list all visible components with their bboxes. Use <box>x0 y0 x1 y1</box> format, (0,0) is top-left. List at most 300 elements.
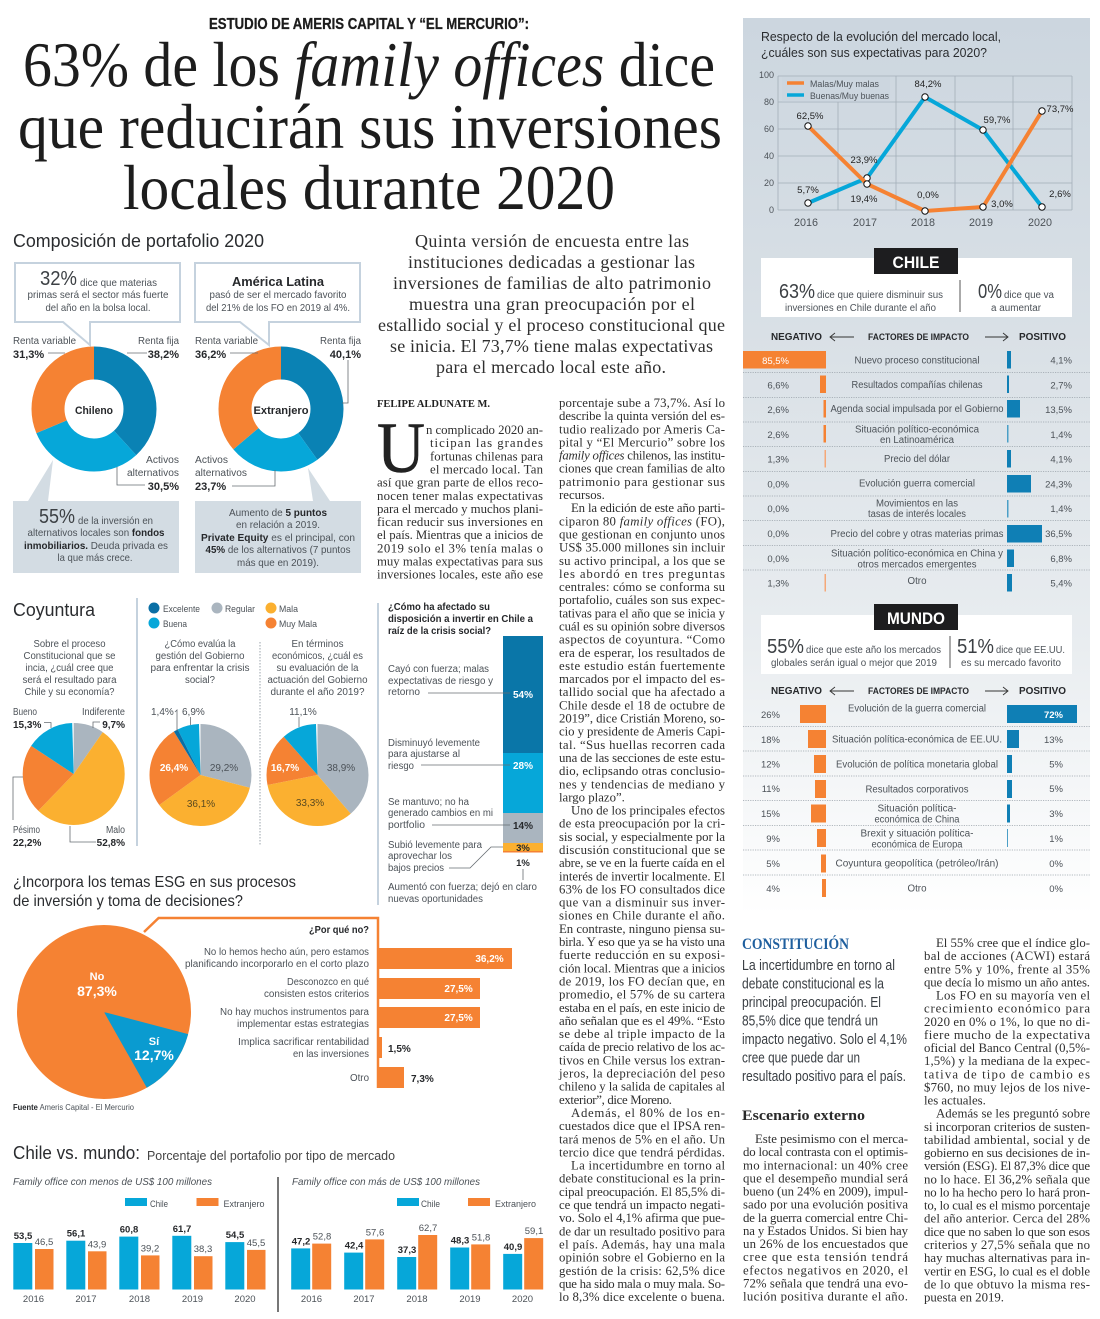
question 2: gestión del Gobierno <box>156 651 245 662</box>
sidebar text: principal preocupación. El <box>742 994 881 1011</box>
article column 2: nes y tendencias de mediano y <box>559 777 726 791</box>
title: locales durante 2020 <box>123 153 615 223</box>
stack labels: Subió levemente para <box>388 840 482 851</box>
chart: menos de 100 millones <box>13 1177 266 1305</box>
article column 3: bueno (un 24% en 2009), impul- <box>743 1184 908 1198</box>
question 1: Chile y su economía? <box>24 687 115 698</box>
por que no bars: 36,2% <box>475 954 504 965</box>
article column 4: puesta en 2019. <box>924 1290 1004 1304</box>
article column 4: hay muchas alternativas para in- <box>924 1251 1090 1265</box>
pie 2 labels: 36,1% <box>187 799 215 810</box>
title: 63% de los family offices dice <box>23 30 715 100</box>
article column 2: el país. Además, hay una mala <box>559 1238 725 1252</box>
question 1: incia, ¿cuál cree que <box>26 663 114 674</box>
question 1: Sobre el proceso <box>34 639 106 650</box>
positive bars: 36,5% <box>1045 529 1073 540</box>
positive bars: 5% <box>1049 760 1064 770</box>
callout: private equity: 45% de los alternativos (7 puntos <box>206 544 350 556</box>
chart heading: Respecto de la evolución del mercado local, <box>761 30 1001 44</box>
callout: materias primas: dice que materias <box>80 277 157 289</box>
chart: mas de 100 millones: 42,4 <box>345 1241 364 1252</box>
negative bars: 9% <box>766 834 781 845</box>
chart heading <box>761 30 1001 60</box>
positive bars: 5,4% <box>1050 578 1073 590</box>
positive bars: 0% <box>1049 884 1064 895</box>
data labels <box>797 79 1074 210</box>
article column 3: lución positiva durante el año. <box>743 1290 908 1304</box>
por que no labels: Desconozco en qué <box>287 977 369 988</box>
article column 4: 2020 en 0% o 1%, lo que no di- <box>924 1015 1090 1029</box>
article column 2: de dar un resultado positivo para <box>559 1224 725 1238</box>
article column 2: interés de invertir localmente. El <box>559 869 725 883</box>
data labels: 62,5% <box>797 111 824 122</box>
panel: Chile factors <box>743 248 1090 592</box>
article column 4: $760, no muy lejos de los nive- <box>924 1080 1090 1094</box>
source: Fuente Ameris Capital - El Mercurio <box>13 1103 135 1112</box>
stack heading: raíz de la crisis social? <box>388 626 491 637</box>
article column 3: cree que esta tensión tendrá <box>743 1250 908 1264</box>
chart: mas de 100 millones: Chile <box>421 1199 440 1209</box>
article column 4: dice que no saben lo que son esos <box>924 1225 1090 1239</box>
legend: Regular <box>225 604 255 615</box>
por que no labels: Otro <box>350 1073 369 1084</box>
article column 4: tabilidad ambiental, social y de <box>924 1133 1090 1147</box>
negative bars: 6,6% <box>767 380 790 392</box>
stack labels: retorno <box>388 687 420 698</box>
article column 2: que van a disminuir sus inver- <box>559 896 725 910</box>
article column 1: inversiones locales, este año ese <box>377 568 543 582</box>
callout: private equity: Private Equity es el principal, con <box>201 532 355 544</box>
sidebar heading: CONSTITUCIÓN <box>742 934 849 953</box>
connector outline <box>144 918 378 1088</box>
article column 1: el mercado local. Tan <box>430 462 544 476</box>
axis labels: 2020 <box>1028 217 1052 229</box>
article column 2: describe la quinta versión del es- <box>559 409 725 423</box>
axis labels: 2016 <box>794 217 818 229</box>
chart: mas de 100 millones <box>291 1177 543 1305</box>
positive bars: 1,4% <box>1050 504 1073 515</box>
MUNDO tag: MUNDO <box>887 609 945 628</box>
callout: private equity: más que en 2019). <box>237 557 319 569</box>
stack heading: disposición a invertir en Chile a <box>388 614 533 625</box>
summary box: es su mercado favorito <box>961 658 1061 669</box>
article column 4: oficial del Banco Central (0,5%- <box>924 1041 1090 1055</box>
pie 2 labels: 26,4% <box>160 763 188 774</box>
positive bars: 72% <box>1044 710 1064 721</box>
donut: chileno <box>48 363 140 455</box>
question 2: social? <box>185 675 215 686</box>
pie 1 labels: 22,2% <box>13 838 41 849</box>
callout: america latina: pasó de ser el mercado favorito <box>210 289 347 301</box>
por que no bars: 27,5% <box>444 984 473 995</box>
factor labels: Evolución guerra comercial <box>859 478 975 490</box>
donut value labels: Renta fija <box>138 336 179 347</box>
factor labels: tasas de interés locales <box>868 509 966 520</box>
data labels: 73,7% <box>1047 104 1074 115</box>
article column 2: cio y presidente de Ameris Capi- <box>559 725 725 739</box>
article column 2: que gestionan en conjunto unos <box>559 528 725 542</box>
stacked segments: 14% <box>513 821 533 832</box>
pie 3 labels: 16,7% <box>271 763 299 774</box>
article column 4: criterios y 27,5% señala que no <box>924 1238 1090 1252</box>
por que no bars: 27,5% <box>444 1013 473 1024</box>
article column 3: sado por una evolución positiva <box>743 1198 908 1212</box>
question 3: actuación del Gobierno <box>268 675 368 686</box>
article column 4: bal de acciones (ACWI) estará <box>924 949 1090 963</box>
chart: mas de 100 millones: 40,9 <box>504 1242 522 1253</box>
negative bars: 4% <box>766 884 781 895</box>
article column 3: un 26% de los encuestados que <box>743 1237 908 1251</box>
callout: fondos inmobiliarios: la que más crece. <box>58 552 132 564</box>
article column 2: tercio dice que tendrá pérdidas. <box>559 1145 725 1159</box>
factor labels: otros mercados emergentes <box>858 560 976 570</box>
donut: extranjero <box>235 363 327 455</box>
donut value labels: alternativos <box>195 468 247 479</box>
data labels: 5,7% <box>797 185 819 196</box>
pie 1 labels: 52,8% <box>97 838 125 849</box>
chart: menos de 100 millones: 54,5 <box>226 1230 245 1241</box>
article column 4: no lo ha hecho pero lo hará pron- <box>924 1186 1090 1200</box>
chart: menos de 100 millones: 45,5 <box>247 1238 265 1249</box>
ESG pie labels: 87,3% <box>77 983 117 999</box>
article column 2: tativas para el año que se inicia y <box>559 606 726 620</box>
article column 3: que el desempeño mundial será <box>743 1171 908 1185</box>
article column 2: Uno de los principales efectos <box>571 804 725 818</box>
positive bars: 3% <box>1049 809 1064 820</box>
ESG pie labels <box>77 971 174 1063</box>
ESG heading: ¿Incorpora los temas ESG en sus procesos <box>13 874 296 891</box>
article column 4: vertir en ESG, lo cual es el doble <box>924 1264 1090 1278</box>
data labels: 3,0% <box>991 199 1013 210</box>
callout: fondos inmobiliarios: de la inversión en <box>78 515 153 527</box>
article column 2: cuestados dice que el IPSA ren- <box>559 1119 725 1133</box>
negative bars: 0,0% <box>767 480 790 490</box>
article column 2: año señalan que es el 49%. “Esto <box>559 1014 725 1028</box>
stacked segments <box>503 636 543 869</box>
article column 2: ción local. Mientras que a inicios <box>559 961 725 975</box>
chart: menos de 100 millones: 2019 <box>182 1294 203 1305</box>
negative bars: 11% <box>762 784 781 795</box>
axis labels: 60 <box>764 124 774 134</box>
article column 3: de la guerra comercial entre Chi- <box>743 1211 908 1225</box>
stack heading <box>388 602 533 637</box>
factor labels: Coyuntura geopolítica (petróleo/Irán) <box>836 858 998 870</box>
question 3: En términos <box>292 639 344 650</box>
stack labels: riesgo <box>388 761 414 772</box>
article column 4: versión (ESG). El 87,3% dice que <box>924 1159 1090 1173</box>
article column 2: La incertidumbre en torno al <box>571 1159 725 1173</box>
deck intro text: instituciones dedicadas a gestionar las <box>408 252 695 272</box>
chart: menos de 100 millones: 46,5 <box>35 1237 53 1248</box>
positive bars: 4,1% <box>1050 454 1073 466</box>
donut value labels: Renta fija <box>320 336 361 347</box>
positive bars: 24,3% <box>1045 480 1073 490</box>
article column 1: muy malas expectativas para sus <box>377 554 543 568</box>
stack labels: Cayó con fuerza; malas <box>388 664 489 675</box>
legend: Malas/Muy malas <box>810 79 879 89</box>
factor labels: Situación político-económica en China y <box>831 548 1003 560</box>
factor labels: económica de China <box>874 814 960 826</box>
question 3: su evaluación de la <box>276 663 359 674</box>
article column 1: así que gran parte de ellos reco- <box>377 476 543 490</box>
donut value labels: Renta variable <box>195 336 258 347</box>
chart: menos de 100 millones: 61,7 <box>173 1224 191 1235</box>
article column 2: de 2019, los FO decían que, en <box>559 974 726 988</box>
ESG pie labels: Sí <box>149 1036 160 1048</box>
title: que reducirán sus inversiones <box>18 92 722 162</box>
article column 2: portafolio, cuáles son sus expec- <box>559 593 725 607</box>
deck intro text: inversiones de familias de alto patrimonio <box>393 273 711 293</box>
subheading: Porcentaje del portafolio por tipo de mercado <box>147 1149 395 1163</box>
stack heading: ¿Cómo ha afectado su <box>388 602 490 613</box>
article column 2: Además, el 80% de los en- <box>571 1106 725 1120</box>
pie 2 labels: 29,2% <box>210 763 238 774</box>
axis labels: 100 <box>759 70 774 80</box>
article column 2: ciparon 80 family offices (FO), <box>559 514 725 528</box>
summary box: 55% <box>767 636 804 658</box>
article column 2: birla. Y eso que ya se ha visto una <box>559 935 725 949</box>
legend: Muy Mala <box>279 619 318 630</box>
axis labels: 40 <box>764 151 774 161</box>
sidebar text: La incertidumbre en torno al <box>742 957 895 974</box>
article column 2: abre, se ve en la fuerte caída en el <box>559 856 725 870</box>
data labels: 19,4% <box>851 194 878 205</box>
article column 1: ticipan las grandes <box>430 436 543 450</box>
sidebar text: resultado positivo para el país. <box>742 1068 906 1085</box>
article column 4 <box>924 936 1090 1304</box>
article column 2: marcados por el impacto del es- <box>559 672 725 686</box>
negative bars: 15% <box>761 809 781 820</box>
stack labels: Disminuyó levemente <box>388 738 480 749</box>
chart: menos de 100 millones: 2020 <box>234 1294 256 1305</box>
positive bars: 1,4% <box>1050 430 1073 441</box>
negative bars: 2,6% <box>767 405 790 416</box>
article column 4: fiere mucho de la expectativa <box>924 1028 1090 1042</box>
article column 2: estaba en el país, en este inicio de <box>559 1001 725 1015</box>
positive bars: 6,8% <box>1050 554 1073 565</box>
por que no labels: consisten estos criterios <box>264 989 369 1000</box>
positive bars: 2,7% <box>1050 380 1073 392</box>
positive bars: 1% <box>1049 834 1064 845</box>
stacked segments: 28% <box>513 761 533 772</box>
pie 2 labels: 1,4% <box>151 707 174 718</box>
stacked segments: 1% <box>516 858 530 869</box>
chart: mas de 100 millones: Extranjero <box>495 1199 536 1209</box>
article column 2 <box>558 396 726 1304</box>
donut label: Chileno <box>75 405 113 417</box>
pie 1 labels: 9,7% <box>102 720 125 731</box>
negative bars: 18% <box>761 735 781 746</box>
axis labels: 2019 <box>969 217 993 229</box>
article column 3: na y Estados Unidos. Si bien hay <box>743 1224 909 1238</box>
stack labels: para ajustarse al <box>388 749 460 760</box>
article column 1: el país. Mientras que a inicios de <box>377 528 543 542</box>
article column 2: se debe al triple impacto de la <box>559 1027 725 1041</box>
CHILE tag: CHILE <box>892 253 940 272</box>
chart: mas de 100 millones: 51,8 <box>472 1232 490 1243</box>
article column 3: mo internacional: un 40% cree <box>743 1158 908 1172</box>
positive bars: 4,1% <box>1050 356 1073 366</box>
stack labels: expectativas de riesgo y <box>388 676 493 687</box>
factor labels: en Latinoamérica <box>880 435 954 446</box>
pie 1 labels <box>13 707 125 849</box>
article column 2: tudio realizado por Ameris Ca- <box>559 422 725 436</box>
pie chart 3 <box>292 750 343 800</box>
pie 2 labels <box>151 707 238 810</box>
factor labels: Otro <box>908 884 927 894</box>
sidebar text: debate constitucional es la <box>742 976 885 992</box>
por que no bars: 7,3% <box>411 1074 434 1085</box>
callout: america latina <box>195 263 360 345</box>
panel: coyuntura <box>13 598 368 849</box>
pie 1 labels: Bueno <box>13 707 37 718</box>
deck intro text <box>378 231 725 377</box>
article column 2: exterior”, dice Moreno. <box>559 1093 672 1107</box>
article column 4: de lo que obtuvo la misma res- <box>924 1277 1090 1291</box>
article column 2: una de las secciones de este estu- <box>559 751 725 765</box>
chart: mas de 100 millones: 37,3 <box>398 1245 416 1256</box>
positive bars: 13% <box>1044 735 1064 746</box>
article column 2: era de esperar, los resultados de <box>559 646 725 660</box>
chart: mas de 100 millones: 48,3 <box>451 1236 469 1246</box>
factor header <box>771 686 1066 697</box>
donut value labels: Activos <box>195 455 228 466</box>
factor labels: Nuevo proceso constitucional <box>854 356 980 366</box>
factor header: NEGATIVO <box>771 686 822 697</box>
factor header: FACTORES DE IMPACTO <box>868 332 969 342</box>
factor labels: Otro <box>908 576 927 587</box>
negative bars: 2,6% <box>767 430 790 441</box>
question 2: ¿Cómo evalúa la <box>164 639 236 650</box>
article column 4: Los FO en su mayoría ven el <box>936 988 1090 1002</box>
article column 2: tal. “Sus huellas recorren cada <box>559 738 725 752</box>
article column 2: debate constitucional es la prin- <box>559 1172 725 1186</box>
deck intro text: Quinta versión de encuesta entre las <box>415 231 689 251</box>
pie 1 labels: Pésimo <box>13 825 40 836</box>
heading: Composición de portafolio 2020 <box>13 231 264 251</box>
stack labels: generado cambios en mi <box>388 808 493 819</box>
callout: private equity: en relación a 2019. <box>236 519 320 531</box>
article column 4: no lo hace. El 36,2% señala que <box>924 1172 1090 1186</box>
article column 1: fican reducir sus inversiones en <box>377 515 544 529</box>
deck intro text: se inicia. El 73,7% tiene malas expectativas <box>390 336 713 356</box>
article column 4: crecimiento económico para <box>924 1002 1090 1016</box>
article column 2: discusión constitucional que se <box>559 843 725 857</box>
factor labels: Precio del dólar <box>884 454 951 465</box>
chart: menos de 100 millones: 53,5 <box>14 1231 33 1242</box>
article column 1: nocen tener malas expectativas <box>377 489 543 503</box>
article column 2: 2019”, dice Cristián Moreno, so- <box>559 712 725 726</box>
article column 4: gobierno en sus decisiones de in- <box>924 1146 1090 1160</box>
article column 2: En la edición de este año parti- <box>571 501 725 515</box>
article column 2: opinión sobre el Gobierno en la <box>559 1251 725 1265</box>
chart: mas de 100 millones: 52,8 <box>313 1232 331 1243</box>
data labels: 0,0% <box>917 190 939 201</box>
por que no labels: ¿Por qué no? <box>309 925 369 936</box>
panel: Chile vs mundo <box>13 1143 543 1312</box>
negative bars: 0,0% <box>767 554 790 565</box>
pie chart 2 <box>175 750 226 800</box>
title <box>18 30 722 223</box>
por que no labels <box>185 925 369 1084</box>
pie 1 labels: Indiferente <box>82 707 125 718</box>
factor labels: Resultados compañías chilenas <box>852 380 982 391</box>
chart: mas de 100 millones: 2016 <box>301 1294 322 1305</box>
MUNDO tag <box>874 604 958 630</box>
chart: menos de 100 millones: 2016 <box>23 1294 44 1305</box>
negative bars: 12% <box>761 760 781 770</box>
legend: Excelente <box>163 604 200 615</box>
article column 1: para el mercado y muchos plani- <box>377 502 543 516</box>
chart: mas de 100 millones: 2017 <box>353 1294 375 1305</box>
article column 2: sis social, y especialmente por la <box>559 830 725 844</box>
factor labels: Evolución de política monetaria global <box>836 760 998 770</box>
factor header <box>771 332 1066 343</box>
article column 2: ciones que crean familias de alto <box>559 462 725 476</box>
article column 3 <box>743 1132 909 1304</box>
donut value labels: 30,5% <box>148 481 179 493</box>
article column 3: do local contrasta con el optimis- <box>743 1145 908 1159</box>
chart: mas de 100 millones: 59,1 <box>525 1226 543 1237</box>
summary box: dice que quiere disminuir sus <box>817 290 943 301</box>
donut value labels: 23,7% <box>195 481 226 493</box>
pie 3 labels <box>271 707 355 809</box>
donut value labels <box>13 336 361 493</box>
question 1 <box>22 639 117 698</box>
factor labels: Movimientos en las <box>876 498 958 510</box>
CHILE tag <box>874 248 958 274</box>
axis labels <box>759 70 1052 229</box>
donut value labels: Activos <box>146 455 179 466</box>
donut value labels: alternativos <box>127 468 179 479</box>
summary box: inversiones en Chile durante el año <box>785 303 936 314</box>
article column 4: que decía lo mismo un año antes. <box>924 975 1090 989</box>
panel: Mundo factors <box>743 604 1090 897</box>
stack labels: bajos precios <box>388 863 444 874</box>
ESG heading <box>13 874 296 910</box>
article column 2: patrimonio para gestionar sus <box>559 475 725 489</box>
positive bars <box>1007 351 1073 592</box>
pie 2 labels: 6,9% <box>182 707 205 718</box>
article column 2: tallido social que ha afectado a <box>559 685 725 699</box>
factor labels: Agenda social impulsada por el Gobierno <box>830 404 1004 415</box>
por que no labels: Implica sacrificar rentabilidad <box>238 1037 369 1048</box>
factor labels: Brexit y situación política- <box>860 828 974 840</box>
kicker: ESTUDIO DE AMERIS CAPITAL Y “EL MERCURIO”: <box>209 16 529 33</box>
chart: mas de 100 millones: 2019 <box>459 1294 481 1305</box>
factor labels: Situación político-económica <box>855 424 979 436</box>
data labels: 59,7% <box>984 115 1011 126</box>
drop cap: U <box>377 408 425 488</box>
donut value labels: 40,1% <box>330 349 361 361</box>
callout: fondos inmobiliarios: 55% <box>39 506 75 528</box>
donut value labels: 36,2% <box>195 349 226 361</box>
callout: america latina: del 21% de los FO en 2019 al 4%. <box>206 302 350 314</box>
chart heading: ¿cuáles son sus expectativas para 2020? <box>761 46 987 60</box>
sidebar: constitucion <box>742 934 907 1085</box>
article column 2: chileno y la salida de capitales al <box>559 1080 725 1094</box>
chart: menos de 100 millones: Chile <box>150 1199 168 1209</box>
por que no labels: No hay muchos instrumentos para <box>220 1007 369 1018</box>
article column 1: fortunas chilenas para <box>430 449 543 463</box>
summary box: globales serán igual o mejor que 2019 <box>771 658 937 669</box>
donut value labels: 38,2% <box>148 349 179 361</box>
summary box: dice que va <box>1004 290 1054 301</box>
article column 3: Este pesimismo con el merca- <box>755 1132 908 1146</box>
sidebar text: 85,5% dice que tendrá un <box>742 1012 878 1030</box>
factor labels <box>830 356 1004 587</box>
chart: menos de 100 millones: 2017 <box>75 1294 97 1305</box>
